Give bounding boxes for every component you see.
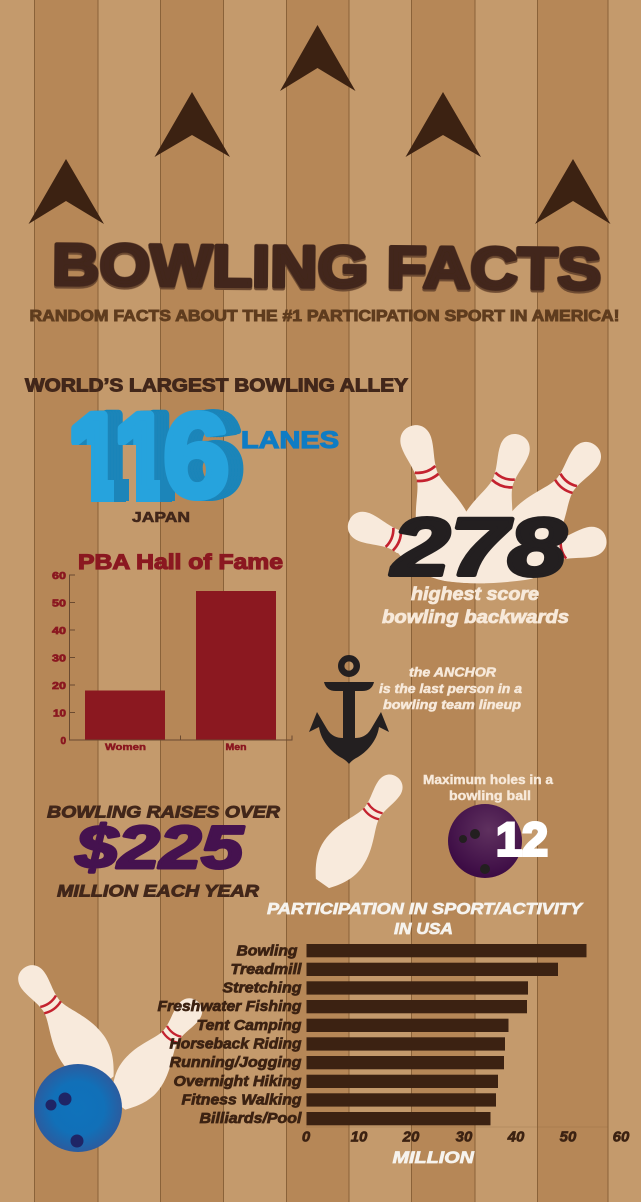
x axis title: MILLION xyxy=(392,1149,475,1167)
anchor fact text xyxy=(379,666,522,712)
lanes label: LANES xyxy=(241,427,339,454)
big number 116: 11 xyxy=(69,390,168,522)
largest alley heading: WORLD’S LARGEST BOWLING ALLEY xyxy=(25,376,408,396)
faint baseline xyxy=(306,1126,608,1128)
category labels: Treadmill xyxy=(230,962,303,978)
anchor fact text: the ANCHOR xyxy=(409,666,496,680)
x axis labels: Women xyxy=(105,742,146,753)
y axis labels xyxy=(52,571,67,747)
subtitle: RANDOM FACTS ABOUT THE #1 PARTICIPATION SPORT IN AMERICA! xyxy=(30,308,620,325)
x axis labels: 0 xyxy=(302,1128,311,1146)
x axis labels: 50 xyxy=(560,1128,577,1146)
lead in: BOWLING RAISES OVER xyxy=(47,802,281,822)
y axis labels: 60 xyxy=(52,571,67,582)
axes xyxy=(70,575,292,740)
category labels: Billiards/Pool xyxy=(200,1111,303,1127)
max holes stat xyxy=(423,772,554,878)
bars xyxy=(306,944,586,1125)
category labels: Overnight Hiking xyxy=(174,1074,302,1090)
icon: purple ball xyxy=(448,804,522,878)
caption: bowling backwards xyxy=(382,607,569,627)
big number 116 xyxy=(71,409,244,502)
category labels: Horseback Riding xyxy=(170,1036,302,1052)
big number 116: 6 xyxy=(163,389,230,523)
pins cluster with 278 stat xyxy=(339,417,616,627)
number 278: 278 xyxy=(389,502,566,593)
x axis labels: 30 xyxy=(456,1128,473,1146)
location: JAPAN xyxy=(132,510,190,526)
x axis labels: Men xyxy=(226,742,247,753)
anchor fact text: is the last person in a xyxy=(379,682,522,696)
x axis labels xyxy=(105,742,247,753)
chart title: IN USA xyxy=(394,921,453,938)
chart: participation by activity xyxy=(158,901,630,1167)
chart: PBA Hall of Fame xyxy=(52,550,292,753)
number 12: 12 xyxy=(496,812,548,866)
x axis labels xyxy=(302,1128,630,1146)
icon: anchor xyxy=(309,658,389,764)
title: BOWLING FACTS xyxy=(52,233,601,302)
y axis labels: 20 xyxy=(52,681,67,692)
icon: scattered pins xyxy=(348,425,606,584)
category labels: Stretching xyxy=(222,980,302,996)
chart title: PARTICIPATION IN SPORT/ACTIVITY xyxy=(267,901,583,918)
y axis labels: 40 xyxy=(52,626,67,637)
caption: highest score xyxy=(411,584,539,604)
follow on: MILLION EACH YEAR xyxy=(57,882,260,900)
y axis labels: 10 xyxy=(53,708,67,720)
116 lanes stat xyxy=(71,409,339,522)
lane arrows xyxy=(28,25,610,224)
category labels: Fitness Walking xyxy=(182,1092,302,1108)
category labels: Freshwater Fishing xyxy=(158,999,302,1015)
x axis labels: 40 xyxy=(507,1128,525,1146)
chart title xyxy=(267,901,583,938)
caption xyxy=(382,584,569,627)
amount: $225 xyxy=(75,814,245,881)
category labels: Tent Camping xyxy=(196,1018,302,1034)
caption xyxy=(423,772,554,803)
x axis labels: 10 xyxy=(351,1128,368,1146)
y axis labels: 50 xyxy=(52,598,67,610)
y axis labels: 0 xyxy=(60,736,66,747)
anchor fact text: bowling team lineup xyxy=(383,698,521,712)
category labels: Running/Jogging xyxy=(170,1055,302,1071)
fundraising stat xyxy=(47,802,281,900)
caption: bowling ball xyxy=(449,788,531,803)
y axis labels: 30 xyxy=(52,654,67,664)
bars xyxy=(85,591,276,740)
category labels: Bowling xyxy=(236,944,298,960)
x axis labels: 60 xyxy=(613,1128,630,1146)
icon: pins and blue ball xyxy=(4,953,215,1152)
category labels xyxy=(158,944,303,1127)
icon: single pin xyxy=(304,764,416,897)
caption: Maximum holes in a xyxy=(423,772,554,787)
chart title: PBA Hall of Fame xyxy=(78,550,283,574)
x axis labels: 20 xyxy=(402,1128,420,1146)
